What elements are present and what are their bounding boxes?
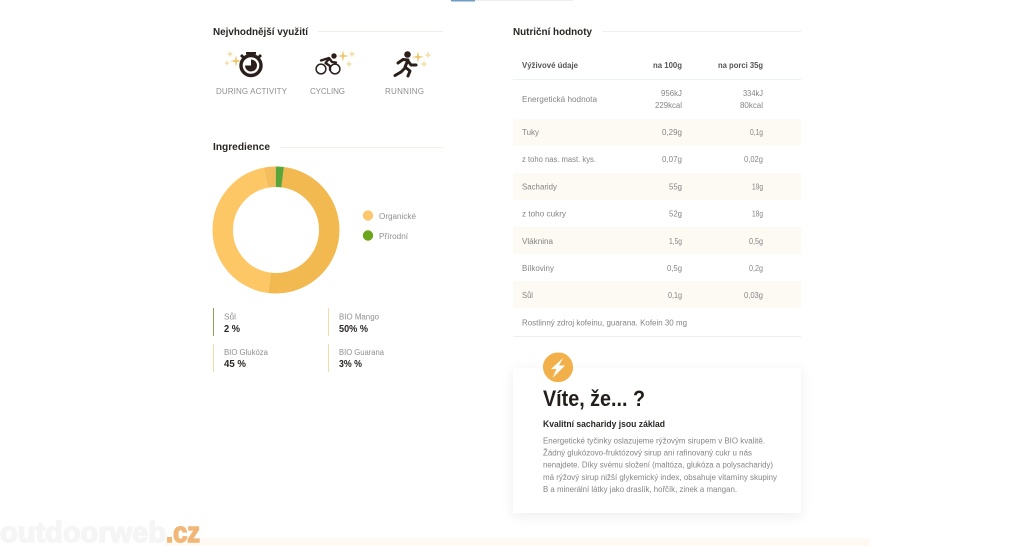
row: salt: Sůl xyxy=(522,291,533,300)
table header: na porci 35g xyxy=(718,61,763,70)
card paragraph: má rýžový sirup nižší glykemický index, obsahuje vitamíny skupiny xyxy=(543,473,777,482)
row: carbohydrates: 55g xyxy=(669,182,682,192)
stat: glucose: BIO Glukóza xyxy=(224,348,269,357)
table header: na 100g xyxy=(653,61,682,70)
row: salt xyxy=(522,291,763,300)
panel: did you know card xyxy=(513,352,801,513)
row: fats: 0,1g xyxy=(750,128,763,137)
icon: running xyxy=(395,51,432,76)
table header: Výživové údaje xyxy=(522,61,579,70)
stat: glucose xyxy=(213,344,269,372)
row: fats: Tuky xyxy=(522,128,539,137)
heading: ingredients: Ingredience xyxy=(213,141,270,153)
stat: mango xyxy=(328,308,380,336)
top tab indicator xyxy=(451,0,573,2)
row: saturated fats: 0,07g xyxy=(662,155,682,164)
row: protein xyxy=(522,264,763,273)
stat: mango: BIO Mango xyxy=(339,312,380,322)
row: salt: 0,1g xyxy=(668,291,682,300)
stat: glucose: 45 % xyxy=(224,358,247,370)
nutrition table xyxy=(513,61,801,337)
table header xyxy=(522,61,763,70)
label: running: RUNNING xyxy=(385,87,424,96)
row: sugars: 18g xyxy=(752,210,763,218)
label: cycling: CYCLING xyxy=(310,87,345,96)
row: sugars xyxy=(522,210,763,218)
icon: cycling xyxy=(316,50,356,74)
panel: ingredients xyxy=(213,141,443,372)
stat: salt xyxy=(213,308,241,336)
card paragraph xyxy=(543,436,777,494)
stat: guarana: BIO Guarana xyxy=(339,348,385,357)
row: fibre: 1,5g xyxy=(669,237,682,246)
stat: mango: 50% % xyxy=(339,323,369,335)
row: energy: Energetická hodnota xyxy=(522,95,598,104)
row: protein: Bílkoviny xyxy=(522,264,554,273)
icon: lightning badge xyxy=(543,352,573,382)
heading: nutrition: Nutriční hodnoty xyxy=(513,26,592,38)
card subtitle: Kvalitní sacharidy jsou základ xyxy=(543,419,665,430)
table footnote: Rostlinný zdroj kofeinu, guarana. Kofein 30 mg xyxy=(522,318,687,328)
row: saturated fats: 0,02g xyxy=(744,155,763,164)
row: fibre xyxy=(522,237,763,246)
stat: guarana xyxy=(328,344,385,372)
row: saturated fats xyxy=(522,155,763,164)
row: energy: 229kcal xyxy=(655,101,682,110)
legend: Organické xyxy=(379,212,417,221)
row: energy: 80kcal xyxy=(740,101,763,110)
row: salt: 0,03g xyxy=(744,291,763,300)
row: sugars: 52g xyxy=(669,210,682,218)
row: carbohydrates: Sacharidy xyxy=(522,182,557,192)
footer band xyxy=(165,538,870,546)
row: sugars: z toho cukry xyxy=(522,210,566,218)
card paragraph: Energetické tyčinky oslazujeme rýžovým sirupem v BIO kvalitě. xyxy=(543,436,765,446)
card paragraph: Žádný glukózovo-fruktózový sirup ani rafinovaný cukr u nás xyxy=(543,448,752,458)
row: carbohydrates: 19g xyxy=(752,182,763,192)
card paragraph: B a minerální látky jako draslík, hořčík, zinek a mangan. xyxy=(543,485,737,494)
row: fats xyxy=(522,128,763,137)
stat: salt: 2 % xyxy=(224,323,241,335)
row: protein: 0,2g xyxy=(749,264,763,273)
row: saturated fats: z toho nas. mast. kys. xyxy=(522,155,596,164)
row: energy: 334kJ xyxy=(743,89,763,98)
panel: best use xyxy=(213,26,443,96)
label: during activity: DURING ACTIVITY xyxy=(216,87,288,96)
row: fibre: 0,5g xyxy=(749,237,763,246)
row: energy xyxy=(522,89,763,110)
row: energy: 956kJ xyxy=(661,89,682,98)
row: fats: 0,29g xyxy=(662,128,682,137)
row: protein: 0,5g xyxy=(667,264,682,273)
heading: best use: Nejvhodnější využití xyxy=(213,26,309,38)
stat: guarana: 3% % xyxy=(339,358,363,370)
legend: Přírodní xyxy=(379,232,409,241)
panel: nutrition xyxy=(513,26,801,337)
legend xyxy=(363,210,417,241)
row: fibre: Vláknina xyxy=(522,237,554,246)
card title: Víte, že... ? xyxy=(543,386,645,411)
icon: stopwatch xyxy=(224,50,262,76)
row: carbohydrates xyxy=(522,182,763,192)
stat: salt: Sůl xyxy=(224,312,236,322)
donut chart xyxy=(223,177,329,283)
card paragraph: nenajdete. Díky svému složení (maltóza, glukóza a polysacharidy) xyxy=(543,460,773,470)
